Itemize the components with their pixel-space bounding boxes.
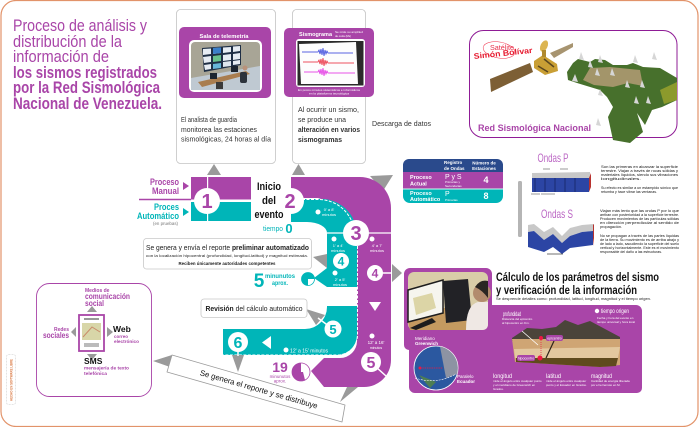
time: 1 a 4 minutos: minutos (331, 248, 345, 253)
panel: canales de distribución (36, 284, 152, 396)
text: ondas s: Viajan más lento que las ondas P por lo que (600, 209, 679, 213)
step 6 with arrow: 6 (234, 335, 243, 352)
panel: canales de distribución: mensajería de texto (84, 366, 129, 372)
step 1: 1 (201, 191, 213, 213)
text: magnitud (591, 373, 630, 387)
logo: satélite simón bolívar: Simón Bolívar (473, 46, 533, 61)
table: registro de ondas (403, 159, 503, 203)
text: ondas s (600, 209, 679, 254)
step 6 with arrow (228, 332, 248, 372)
time: 12 a 15 minutos teal (284, 348, 328, 354)
dashed dividers (223, 199, 358, 355)
image: control room (189, 40, 262, 92)
text: inicio del evento: Inicio (257, 181, 281, 193)
text: ondas p: terrestre. Viajan a través de rocas sólidas y (601, 169, 678, 173)
metric: 19 minutos aprox: aprox. (274, 378, 286, 384)
time: 2 a 5 minutos: minutos (333, 282, 347, 287)
diagram: geological block (512, 320, 620, 367)
time: 12 a 15 minutos teal: 12' a 15' minutos (290, 348, 328, 354)
table: registro de ondas: P (445, 191, 450, 198)
text: meridiano y paralelo: Meridiano (415, 336, 435, 341)
text: ondas p: materiales líquidos, siendo sus vibraciones (601, 173, 678, 177)
text: tiempo origen: Fecha y hora del evento en (597, 316, 634, 320)
badge: hecho en software libre: HECHO EN SOFTWARE LIBRE (10, 358, 14, 401)
table: registro de ondas: Primarias (445, 198, 458, 202)
panel: sismograma: Se mide su amplitud (335, 30, 363, 34)
labels: proceso manual y automático: Automático (137, 211, 179, 221)
title (13, 16, 162, 113)
table: registro de ondas: Primarias y (445, 180, 461, 184)
table: registro de ondas: P y S (445, 174, 462, 181)
step 2: 2 (284, 191, 296, 213)
metric: 19 minutos aprox (270, 359, 310, 384)
panel: red sismológica nacional: Red Sismológica Nacional (478, 123, 591, 133)
metric: 5 minutos aprox: minunutos (265, 274, 296, 280)
text: ondas s: responsable del daño a las estructuras. (600, 250, 662, 254)
panel: canales de distribución: Redes (54, 327, 69, 333)
labels: proceso manual y automático (137, 177, 189, 226)
badge: hecho en software libre (6, 354, 16, 404)
callout: se genera el reporte: Se genera el reporte y se distribuye (199, 368, 319, 411)
time: 12 a 16 minutos purple (368, 334, 385, 350)
labels: proceso manual y automático: Proceso (150, 177, 179, 187)
time: 2 a 5 minutos: 2' a 5' (335, 277, 345, 282)
step 5 teal: 5 (329, 322, 337, 337)
table: registro de ondas: Número de (472, 160, 496, 166)
step 2 (278, 188, 304, 214)
panel: sala de telemetría (176, 10, 276, 164)
time: 4 a 7 minutos: minutos (370, 248, 384, 253)
panel: sala de telemetría: monitorea las estaciones (181, 125, 257, 134)
background shape (404, 268, 642, 393)
title: Nacional de Venezuela. (13, 94, 162, 113)
text: longitud (493, 373, 542, 391)
labels: proceso manual y automático: Proces (154, 202, 179, 212)
step 5 teal (318, 318, 342, 338)
text: latitud: mide el ángulo entre cualquier (546, 379, 586, 383)
text: ondas s: propagación. (600, 225, 622, 229)
panel: sismograma: En pocos minutos sistemáticos e informáticos (298, 88, 360, 92)
step 3: 3 (350, 223, 362, 245)
text: tiempo origen: tiempo origen (601, 308, 629, 315)
panel: sismograma: de onda (Ms) (335, 34, 351, 38)
logo: satélite simón bolívar (473, 39, 533, 61)
text: ondas s: vertical y horizontalmente. Este es el movimiento (600, 246, 679, 250)
arrow: down (369, 302, 381, 311)
table: registro de ondas: Proceso (410, 191, 432, 197)
text: ondas p: longitudinales. (601, 177, 641, 181)
time: 0 a 8 minutos: 0' a 8' (324, 207, 334, 212)
panel: canales de distribución: social (85, 299, 104, 308)
metric: 5 minutos aprox: aprox. (272, 281, 288, 287)
arrow: left (262, 336, 271, 349)
title: los sismos registrados (13, 63, 157, 82)
table: registro de ondas: Estaciones (472, 166, 496, 171)
text: profundidad: profundidad (503, 311, 521, 318)
panel: sismograma: sismogramas (298, 135, 342, 144)
text: magnitud: por el terremoto en M. (591, 383, 621, 387)
text: ondas s: de la tierra. Su movimiento es de arriba abajo y (600, 238, 679, 242)
callout: revisión (201, 299, 325, 325)
panel: sismograma (284, 10, 374, 164)
heading: ondas s: Ondas S (541, 207, 573, 221)
flow: lower teal band (223, 306, 357, 355)
panel: sala de telemetría: Sala de telemetría (200, 34, 249, 40)
logo: satélite simón bolívar: Satélite (490, 45, 514, 52)
panel: canales de distribución: correo (114, 334, 128, 340)
text: ondas s: Producen movimientos de las partículas sólidas (600, 217, 679, 221)
panel: canales de distribución: SMS (84, 356, 103, 366)
map: venezuela (567, 59, 677, 143)
text: ondas p: Son las primeras en alcanzar la superficie (601, 165, 678, 169)
icon: report document (79, 315, 104, 351)
heading: cálculo: y verificación de la información (496, 283, 637, 297)
title: distribución de la (13, 32, 122, 51)
step 4 purple with arrow: 4 (372, 266, 379, 280)
time: 4 a 7 minutos: 4' a 7' (372, 243, 382, 248)
step 1 (194, 188, 220, 214)
inputs: process blocks (191, 177, 251, 221)
metric: 5 minutos aprox (254, 271, 314, 292)
panel: sismograma: Sismograma (299, 32, 333, 38)
text: profundidad: al hipocentro en Km. (502, 321, 530, 325)
divider bar (518, 181, 522, 237)
text: meridiano y paralelo: Ecuador (457, 379, 475, 384)
time: 12 a 16 minutos purple: minutos (370, 346, 382, 350)
time: 0 a 8 minutos (316, 207, 336, 217)
time: 1 a 4 minutos: 1' a 4' (333, 243, 343, 248)
text: latitud: punto y el Ecuador en Grados. (546, 383, 587, 387)
icon: satellite (490, 39, 573, 92)
title: información de (13, 47, 109, 66)
text: longitud: Grados. (493, 387, 504, 391)
panel: cálculo de parámetros (404, 268, 659, 393)
text: profundidad (502, 311, 533, 325)
text: meridiano y paralelo: Greenwich (415, 341, 438, 346)
time: 2 a 5 minutos (332, 270, 347, 287)
text: meridiano y paralelo (415, 336, 475, 384)
text: profundidad: Distancia del epicentro (502, 317, 533, 321)
panel: canales de distribución: electrónico (114, 339, 139, 345)
table: registro de ondas: Actual (410, 182, 427, 188)
text: tiempo origen: tiempo universal y hora local (597, 320, 635, 324)
photo: analyst at computer (408, 272, 491, 330)
flow: teal triangle (314, 268, 327, 287)
step 3 (343, 220, 369, 246)
image: seismogram on tablet (296, 39, 365, 87)
diagram: onda p (531, 169, 591, 194)
text: longitud: y el meridiano de Greenwich en (493, 383, 536, 387)
step 4 purple with arrow (367, 264, 402, 282)
flow: purple band (291, 177, 391, 387)
metric: 19 minutos aprox: minunutos (270, 374, 291, 379)
time: 1 a 4 minutos (331, 236, 345, 253)
panel: sismograma: alteración en varios (298, 125, 360, 134)
text: ondas p: retumba y hace vibrar las ventanas. (601, 190, 657, 194)
labels: proceso manual y automático: Manual (152, 186, 179, 196)
table: registro de ondas: Secundarias (445, 184, 462, 188)
text: ondas s: arriban con posterioridad a la superficie terrestre. (600, 213, 679, 217)
label: descarga de datos: Descarga de datos (372, 119, 431, 128)
step 5 purple (361, 352, 386, 376)
text: tiempo origen (595, 308, 635, 324)
title: Proceso de análisis y (13, 16, 147, 35)
heading: cálculo (496, 270, 659, 301)
text: ondas s: No se propagan a través de las partes líquidas (600, 234, 679, 238)
text: longitud: longitud (493, 373, 512, 380)
callout: reporte preliminar: Reciben únicamente autoridades competentes (178, 261, 276, 266)
text: latitud (546, 373, 587, 387)
panel: sismograma: se produce una (298, 115, 347, 124)
panel: canales de distribución: Medios de (85, 288, 110, 294)
text: tiempo 0: 0 (285, 221, 293, 236)
panel: sismograma: Al ocurrir un sismo, (298, 105, 359, 114)
diagram: geological block: hipocentro (518, 356, 534, 360)
panel: sismograma: en la plataforma tecnológica (309, 92, 349, 96)
step 5 purple: 5 (367, 355, 376, 372)
text: magnitud: magnitud (591, 373, 612, 380)
callout: reporte preliminar: Se genera y envía el reporte preliminar automatizado (146, 243, 309, 252)
labels: proceso manual y automático: (en pruebas) (153, 221, 178, 226)
text: ondas s: en dirección perpendicular al sentido de (600, 221, 679, 225)
title: por la Red Sismológica (13, 78, 160, 97)
arrows from distribution box (153, 355, 358, 402)
step 4 teal (333, 253, 349, 269)
panel: red sismológica nacional (470, 30, 677, 143)
text: inicio del evento (254, 181, 284, 221)
callout: reporte preliminar: con la localización hipocentral (profundidad, longitud-latitud) y magnitud estimada. (146, 253, 308, 258)
text: longitud: mide el ángulo entre cualquier punto (493, 379, 542, 383)
text: ondas p (601, 165, 678, 194)
panel: canales de distribución: telefónica (84, 371, 107, 377)
callout: se genera el reporte (167, 355, 345, 422)
text: inicio del evento: del (262, 195, 276, 207)
metric: 5 minutos aprox: 5 (254, 271, 265, 292)
time: 12 a 16 minutos purple: 12' a 16' (368, 340, 385, 345)
text: tiempo 0: tiempo (263, 226, 283, 233)
table: registro de ondas: Automático (410, 197, 441, 203)
diagram: onda s (528, 224, 594, 254)
time: 0 a 8 minutos: minutos (322, 212, 336, 217)
table: registro de ondas: Proceso (410, 175, 432, 181)
step 4 teal: 4 (338, 254, 345, 268)
text: ondas s: de lado a lado, sacudiendo la superficie del suelo (600, 242, 679, 246)
text: ondas p: Su efecto es similar a un estampido sónico que (601, 186, 678, 190)
text: inicio del evento: evento (254, 209, 284, 221)
table: registro de ondas: 8 (483, 191, 489, 201)
panel: canales de distribución: Web (113, 324, 131, 334)
panel: canales de distribución: sociales (43, 331, 69, 340)
heading: cálculo: Cálculo de los parámetros del sismo (496, 270, 659, 284)
diagram: geological block: epicentro (547, 336, 562, 340)
flow: teal band (291, 199, 357, 287)
time: 4 a 7 minutos (370, 236, 384, 253)
text: tiempo 0 (263, 221, 293, 236)
metric: 19 minutos aprox: 19 (272, 359, 288, 375)
icon: globe (414, 346, 458, 390)
text: latitud: latitud (546, 373, 561, 380)
heading: ondas p: Ondas P (538, 151, 568, 165)
heading: cálculo: Se desprende detalles como: profundidad, latitud, longitud, magnitud y el tiempo origen. (496, 296, 651, 301)
table: registro de ondas: de Ondas (444, 166, 465, 171)
callout: revisión: Revisión del cálculo automático (206, 304, 302, 313)
arrows to cards (207, 164, 393, 191)
panel: sala de telemetría: sismológicas, 24 horas al día (181, 134, 272, 144)
callout: reporte preliminar (144, 238, 327, 269)
table: registro de ondas: Registro (444, 160, 463, 165)
panel: canales de distribución: comunicación (85, 292, 130, 301)
text: magnitud: Cantidad de energía liberada (591, 379, 630, 383)
panel: sala de telemetría: El analista de guardia (181, 115, 238, 124)
table: registro de ondas: 4 (483, 175, 489, 185)
text: meridiano y paralelo: Paralelo (457, 374, 474, 379)
